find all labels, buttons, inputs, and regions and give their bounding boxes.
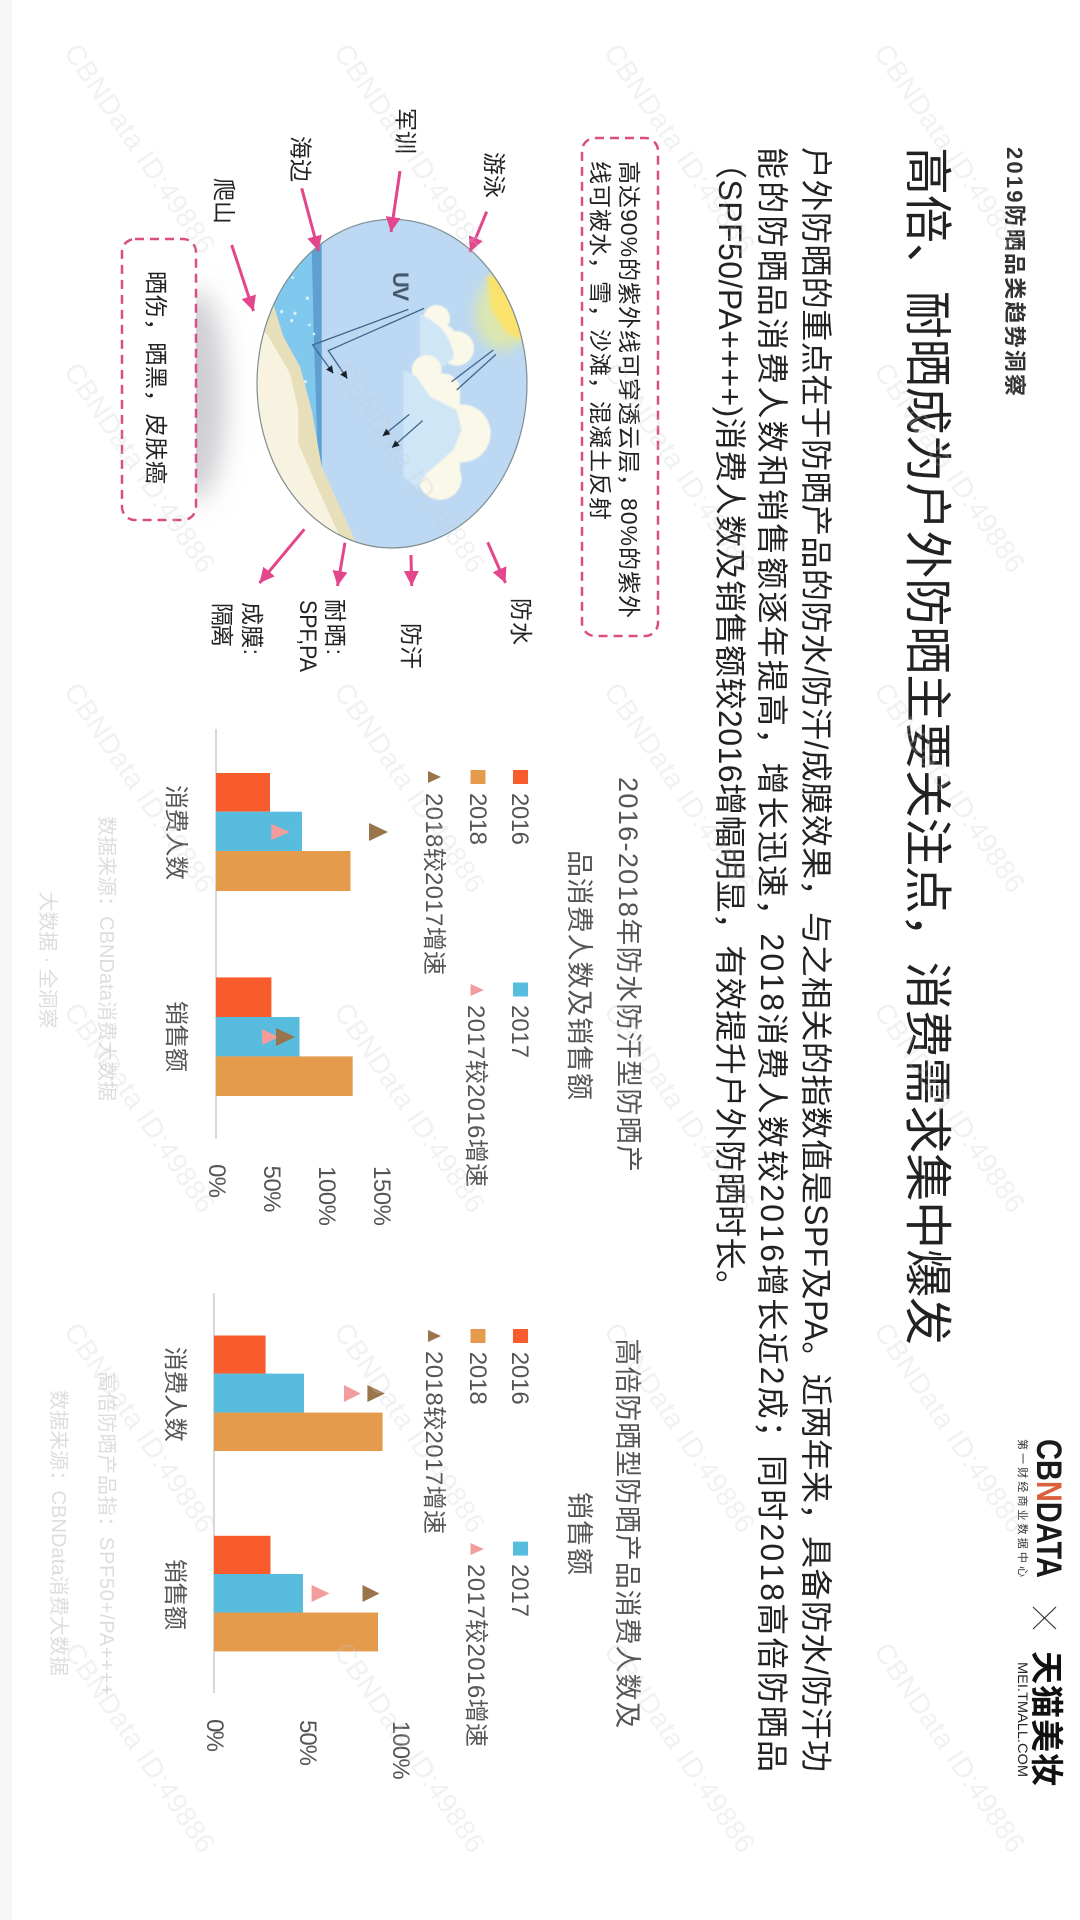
legend xyxy=(420,1329,533,1747)
scenario: military training xyxy=(391,108,418,232)
watermark grid: CBNData ID:49886 xyxy=(598,997,761,1218)
scenario: military training: 军训 xyxy=(392,108,418,154)
watermark grid: CBNData ID:49886 xyxy=(598,38,761,259)
body paragraph: 户外防晒的重点在于防晒产品的防水/防汗/成膜效果，与之相关的指数值是SPF及PA。近两年来，具备防水/防汗功 xyxy=(798,147,834,1772)
callout: sun damage xyxy=(122,239,196,520)
watermark grid: CBNData ID:49886 xyxy=(328,1317,491,1538)
source note: 数据来源：CBNData消费大数据 xyxy=(47,1390,70,1676)
category labels: 消费人数 xyxy=(161,1347,188,1442)
category labels xyxy=(161,1347,188,1630)
watermark grid: CBNData ID:49886 xyxy=(868,1637,1031,1858)
chart title xyxy=(564,777,643,1172)
bars: consumers xyxy=(216,773,388,891)
clouds xyxy=(403,305,491,500)
need: sun endurance: 耐晒: xyxy=(322,599,348,655)
UV label: UV xyxy=(388,272,413,301)
watermark grid: CBNData ID:49886 xyxy=(328,1637,491,1858)
legend: 2017较2016增速 xyxy=(462,1005,489,1187)
callout: UV penetration: 高达90%的紫外线可穿透云层，80%的紫外 xyxy=(616,161,642,618)
chart title xyxy=(564,1338,642,1728)
definition note: 高倍防晒产品指：SPF50+/PA++++ xyxy=(95,1372,118,1696)
value axis labels: 150% xyxy=(368,1166,395,1226)
value axis labels: 50% xyxy=(294,1720,321,1766)
legend xyxy=(420,770,533,1187)
logo: Tmall beauty: MEI.TMALL.COM xyxy=(1015,1662,1031,1777)
need: film forming: 成膜: xyxy=(239,602,265,655)
value axis labels xyxy=(201,1719,414,1780)
value axis labels: 100% xyxy=(313,1166,340,1226)
chart title: 2016-2018年防水防汗型防晒产 xyxy=(613,777,643,1172)
category labels xyxy=(162,785,189,1072)
logo: CBNData: CBNDATA xyxy=(1029,1439,1068,1578)
need: waterproof xyxy=(488,542,534,645)
logo: Tmall beauty: 天猫美妆 xyxy=(1028,1651,1065,1786)
watermark grid: CBNData ID:49886 xyxy=(868,997,1031,1218)
value axis labels: 0% xyxy=(201,1719,228,1752)
legend: 2017 xyxy=(506,1564,533,1617)
watermark grid: CBNData ID:49886 xyxy=(58,1637,221,1858)
category labels: 消费人数 xyxy=(162,785,189,880)
watermark grid: CBNData ID:49886 xyxy=(328,997,491,1218)
watermark grid: CBNData ID:49886 xyxy=(868,677,1031,898)
logo: CBNData: 第一财经商业数据中心 xyxy=(1016,1439,1030,1577)
need: sweatproof xyxy=(398,555,424,669)
watermark grid: CBNData ID:49886 xyxy=(58,38,221,259)
scenario: climbing: 爬山 xyxy=(211,178,237,224)
scenario: seaside: 海边 xyxy=(288,136,314,182)
axis xyxy=(215,729,217,1139)
chart title: 品消费人数及销售额 xyxy=(564,850,594,1100)
chart title: 销售额 xyxy=(564,1492,594,1575)
watermark grid: CBNData ID:49886 xyxy=(328,357,491,578)
legend: 2016 xyxy=(506,793,533,845)
legend: 2018 xyxy=(464,1352,491,1405)
chart panel: high SPF sunscreen xyxy=(47,1293,642,1780)
need: waterproof: 防水 xyxy=(508,598,534,645)
source note: 数据来源：CBNData消费大数据 xyxy=(95,816,118,1101)
legend: 2017 xyxy=(506,1005,533,1058)
scenario: seaside xyxy=(288,136,318,251)
watermark grid: CBNData ID:49886 xyxy=(328,677,491,898)
value axis labels: 100% xyxy=(387,1721,414,1780)
watermark grid: CBNData ID:49886 xyxy=(868,357,1031,578)
watermark grid: CBNData ID:49886 xyxy=(328,38,491,259)
illustration: beach, sky, sun and clouds with UV rays xyxy=(256,218,528,549)
value axis labels: 0% xyxy=(203,1164,230,1198)
water xyxy=(273,230,322,470)
body paragraph: 能的防晒品消费人数和销售额逐年提高，增长迅速，2018消费人数较2016增长近2成；同时2018高倍防晒品 xyxy=(754,147,790,1772)
category labels: 销售额 xyxy=(161,1559,188,1630)
sand xyxy=(264,306,355,541)
legend: 2016 xyxy=(506,1352,533,1405)
body paragraph: （SPF50/PA++++)消费人数及销售额较2016增幅明显，有效提升户外防晒时长。 xyxy=(712,147,748,1302)
watermark grid: CBNData ID:49886 xyxy=(58,997,221,1218)
need: film forming: 隔离 xyxy=(209,603,235,647)
UV reflected rays xyxy=(313,308,496,448)
chart panel: waterproof sunscreen xyxy=(36,729,643,1226)
legend: 2017较2016增速 xyxy=(462,1564,489,1747)
title: 高倍、耐晒成为户外防晒主要关注点，消费需求集中爆发 xyxy=(900,147,953,1345)
callout: sun damage: 晒伤，晒黑，皮肤癌 xyxy=(143,271,169,484)
category labels: 销售额 xyxy=(162,1001,189,1072)
value axis labels: 50% xyxy=(258,1166,285,1212)
bars: sales xyxy=(214,1536,380,1651)
callout: UV penetration xyxy=(582,138,658,636)
need: sun endurance xyxy=(294,543,348,672)
need: sweatproof: 防汗 xyxy=(398,623,424,669)
header label: 2019防晒品类趋势洞察 xyxy=(1002,147,1027,396)
legend: 2018较2017增速 xyxy=(420,793,447,975)
logo: CBNData xyxy=(1016,1439,1068,1578)
need: film forming xyxy=(209,529,304,655)
icon: cross between logos xyxy=(1033,1607,1056,1629)
watermark grid: CBNData ID:49886 xyxy=(868,38,1031,259)
watermark grid: CBNData ID:49886 xyxy=(598,677,761,898)
need: sun endurance: SPF,PA xyxy=(294,600,321,672)
scenario: climbing xyxy=(211,178,254,311)
legend: 2018 xyxy=(464,793,491,845)
chart title: 高倍防晒型防晒产品消费人数及 xyxy=(612,1338,642,1728)
bars: sales xyxy=(216,977,353,1096)
scenario: swimming: 游泳 xyxy=(481,152,507,198)
tagline: 大数据 · 全洞察 xyxy=(36,892,59,1028)
callout: UV penetration: 线可被水，雪，沙滩，混凝土反射 xyxy=(587,161,613,520)
sun xyxy=(475,273,532,350)
legend: 2018较2017增速 xyxy=(420,1351,447,1534)
watermark grid: CBNData ID:49886 xyxy=(598,357,761,578)
watermark grid: CBNData ID:49886 xyxy=(868,1317,1031,1538)
bars: consumers xyxy=(214,1336,385,1451)
value axis labels xyxy=(203,1164,395,1226)
axis xyxy=(213,1293,215,1693)
watermark grid: CBNData ID:49886 xyxy=(58,677,221,898)
body paragraph xyxy=(712,147,834,1772)
watermark grid: CBNData ID:49886 xyxy=(598,1637,761,1858)
watermark grid: CBNData ID:49886 xyxy=(58,357,221,578)
scenario: swimming xyxy=(470,152,507,252)
shadow behind damage callout xyxy=(166,290,226,500)
watermark grid: CBNData ID:49886 xyxy=(58,1317,221,1538)
watermark grid: CBNData ID:49886 xyxy=(598,1317,761,1538)
